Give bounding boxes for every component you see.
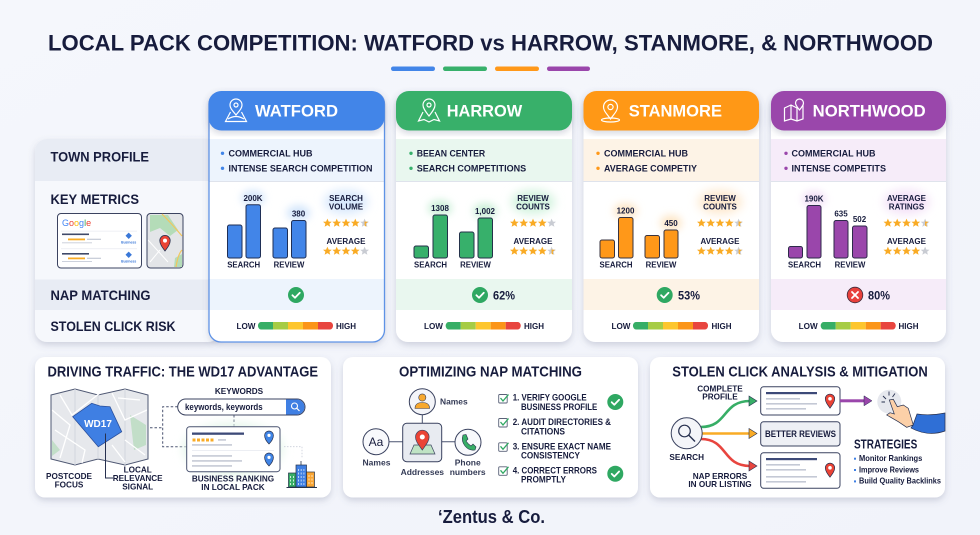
label: business ranking: IN LOCAL PACK — [201, 483, 265, 492]
town profile text — [221, 149, 373, 175]
bar chart — [788, 191, 867, 270]
icon: google listing card: Business — [121, 260, 136, 264]
nap result — [288, 287, 304, 303]
town profile text: COMMERCIAL HUB — [228, 149, 313, 160]
label: nap errors: NAP ERRORS — [693, 472, 748, 481]
checklist: CONSISTENCY — [521, 451, 580, 461]
accent pills — [391, 66, 590, 71]
rating block: COUNTS — [703, 203, 738, 212]
row label: stolen click risk: STOLEN CLICK RISK — [50, 318, 176, 334]
town profile text: INTENSE COMPETITS — [792, 164, 887, 175]
rating block: AVERAGE — [514, 237, 553, 246]
bar chart: 190K — [804, 194, 824, 204]
label: local relevance signal: RELEVANCE — [113, 474, 163, 483]
map: postcode — [51, 389, 148, 465]
bar chart: REVIEW — [460, 260, 492, 270]
icon: map with pin — [147, 214, 183, 268]
listing card top — [761, 387, 840, 415]
footer brand: ‘Zentus & Co. — [438, 507, 545, 527]
strategies: Improve Reviews — [859, 465, 919, 474]
icon: map pin — [226, 99, 246, 122]
label: postcode focus: FOCUS — [55, 480, 84, 490]
town profile text — [784, 149, 887, 175]
icon: google listing card: Google — [62, 218, 91, 228]
risk meter — [424, 322, 544, 331]
risk meter: HIGH — [336, 322, 356, 331]
icon: google listing card: Business — [121, 240, 136, 244]
icon: clicking hand — [877, 390, 945, 433]
header: watford — [208, 91, 384, 130]
panel: row labels — [35, 139, 220, 342]
checklist — [499, 393, 623, 485]
checklist: BUSINESS PROFILE — [521, 402, 597, 412]
strategies: Monitor Rankings — [859, 454, 923, 463]
panel: northwood — [771, 91, 946, 342]
label: keywords: KEYWORDS — [215, 387, 264, 396]
rating block: SEARCH — [329, 194, 363, 203]
bar chart: REVIEW — [835, 260, 866, 270]
header: northwood — [771, 91, 946, 130]
risk meter: LOW — [236, 322, 256, 331]
icon: pin — [602, 100, 620, 122]
risk meter — [799, 322, 919, 331]
label: phone numbers: Phone — [455, 458, 481, 468]
row label: nap matching: NAP MATCHING — [50, 287, 151, 303]
risk meter — [236, 322, 356, 331]
bar chart — [600, 203, 682, 270]
panel: stanmore — [584, 91, 759, 342]
wd17 area: WD17 — [84, 419, 112, 430]
town profile text: SEARCH COMPETITIONS — [417, 164, 527, 175]
checklist: 3. ENSURE EXACT NAME — [513, 441, 611, 451]
town profile text: COMMERCIAL HUB — [604, 149, 688, 160]
panel: stolen click analysis — [650, 357, 945, 498]
bar chart: 1,002 — [475, 207, 496, 216]
bar chart: 450 — [664, 219, 678, 228]
label: names: Names — [363, 458, 391, 468]
search box: keywords, keywords — [185, 402, 263, 413]
nap result — [657, 287, 700, 303]
risk meter: HIGH — [524, 322, 544, 331]
bar chart: 635 — [834, 210, 848, 218]
callout line — [106, 434, 113, 478]
risk meter: HIGH — [898, 322, 919, 331]
rating block: COUNTS — [516, 203, 551, 212]
label: names: Names — [440, 396, 468, 406]
icon: person — [409, 389, 435, 415]
search box — [178, 399, 305, 415]
icon: aa: Aa — [369, 435, 384, 449]
icon: city buildings — [286, 461, 317, 488]
bar chart: 380 — [292, 210, 306, 218]
dotted connector to city — [284, 447, 302, 458]
bar chart: REVIEW — [646, 260, 677, 270]
nap result: 53% — [678, 290, 700, 302]
rating block: REVIEW — [517, 194, 549, 203]
checklist: PROMPTLY — [521, 475, 566, 485]
rating block — [510, 190, 556, 255]
icon: phone — [455, 429, 481, 455]
bar chart: SEARCH — [227, 260, 261, 270]
bar chart: REVIEW — [274, 260, 305, 270]
bar chart: 502 — [853, 215, 867, 224]
listing card bottom — [761, 453, 840, 488]
label: complete profile: COMPLETE — [697, 384, 743, 393]
town profile text — [409, 149, 527, 175]
checklist: 1. VERIFY GOOGLE — [513, 393, 587, 403]
header: watford: WATFORD — [255, 103, 338, 121]
label: search: SEARCH — [669, 453, 704, 462]
header: stanmore — [584, 91, 759, 130]
rating block: AVERAGE — [887, 237, 927, 246]
rating block: VOLUME — [329, 203, 364, 212]
bar chart: 200K — [243, 194, 263, 203]
heading: OPTIMIZING NAP MATCHING — [399, 364, 582, 381]
strategies: Build Quality Backlinks — [859, 477, 941, 486]
header: northwood: NORTHWOOD — [813, 103, 926, 121]
nap result: 62% — [493, 290, 515, 302]
nap result — [472, 287, 515, 303]
bar chart: SEARCH — [788, 260, 821, 270]
panel: optimizing nap — [343, 357, 638, 498]
risk meter: HIGH — [712, 322, 732, 331]
risk meter: LOW — [799, 322, 818, 331]
title: LOCAL PACK COMPETITION: WATFORD vs HARROW, STANMORE, & NORTHWOOD — [48, 30, 933, 56]
risk meter — [612, 322, 732, 331]
heading: STOLEN CLICK ANALYSIS & MITIGATION — [672, 364, 928, 381]
dashed connectors — [150, 407, 234, 447]
rating block — [323, 190, 369, 255]
panel: watford — [208, 91, 384, 342]
town profile text: INTENSE SEARCH COMPETITION — [228, 164, 373, 175]
rating block — [697, 190, 743, 255]
icon: search — [671, 418, 702, 449]
bar chart — [414, 200, 497, 270]
risk meter: LOW — [424, 322, 443, 331]
panel: driving traffic — [35, 357, 331, 498]
arrowheads — [749, 396, 757, 471]
header: harrow: HARROW — [447, 103, 523, 121]
label: business ranking: BUSINESS RANKING — [192, 475, 274, 484]
checklist: CITATIONS — [521, 426, 565, 436]
label: local relevance signal: LOCAL — [124, 466, 152, 475]
risk meter: LOW — [612, 322, 631, 331]
better reviews card — [761, 422, 840, 446]
row label: key metrics: KEY METRICS — [50, 191, 139, 207]
bar chart: SEARCH — [600, 260, 633, 270]
connectors — [389, 415, 455, 442]
header: stanmore: STANMORE — [629, 103, 722, 121]
heading: DRIVING TRAFFIC: THE WD17 ADVANTAGE — [48, 364, 318, 380]
checklist: 4. CORRECT ERRORS — [513, 465, 597, 475]
town profile text: COMMERCIAL HUB — [792, 149, 876, 160]
label: phone numbers: numbers — [450, 467, 486, 477]
rating block: REVIEW — [704, 194, 736, 203]
label: complete profile: PROFILE — [702, 393, 738, 402]
nap result — [847, 287, 890, 303]
icon: folded map — [784, 99, 804, 121]
panel: harrow — [396, 91, 572, 342]
icon: map pin — [418, 99, 440, 122]
bar chart: 1200 — [617, 206, 635, 216]
local pack listing — [183, 423, 283, 475]
icon: aa — [363, 429, 389, 455]
better reviews card: BETTER REVIEWS — [765, 429, 836, 439]
label: addresses: Addresses — [401, 467, 444, 477]
rating block: AVERAGE — [327, 237, 366, 246]
nap result: 80% — [868, 290, 890, 302]
label: nap errors: IN OUR LISTING — [688, 480, 752, 489]
town profile text — [596, 149, 698, 175]
arrow to click — [840, 396, 872, 406]
bar chart: 1308 — [431, 204, 449, 213]
rating block: AVERAGE — [887, 194, 927, 203]
strategies — [854, 437, 941, 486]
icon: google listing card — [58, 214, 142, 268]
label: postcode focus: POSTCODE — [46, 472, 93, 481]
rating block: RATINGS — [889, 203, 925, 212]
rating block — [884, 190, 930, 255]
header: harrow — [396, 91, 572, 130]
icon: address pin on map — [403, 423, 442, 462]
town profile text: AVERAGE COMPETIY — [604, 164, 698, 175]
label: local relevance signal: SIGNAL — [122, 482, 153, 492]
row label: town profile: TOWN PROFILE — [50, 149, 149, 165]
bar chart — [227, 190, 310, 270]
strategies: STRATEGIES — [854, 437, 917, 451]
bar chart: SEARCH — [414, 260, 447, 270]
rating block: AVERAGE — [701, 237, 740, 246]
checklist: 2. AUDIT DIRECTORIES & — [513, 417, 612, 427]
town profile text: BEEAN CENTER — [417, 149, 485, 160]
arrows from search — [701, 401, 750, 466]
